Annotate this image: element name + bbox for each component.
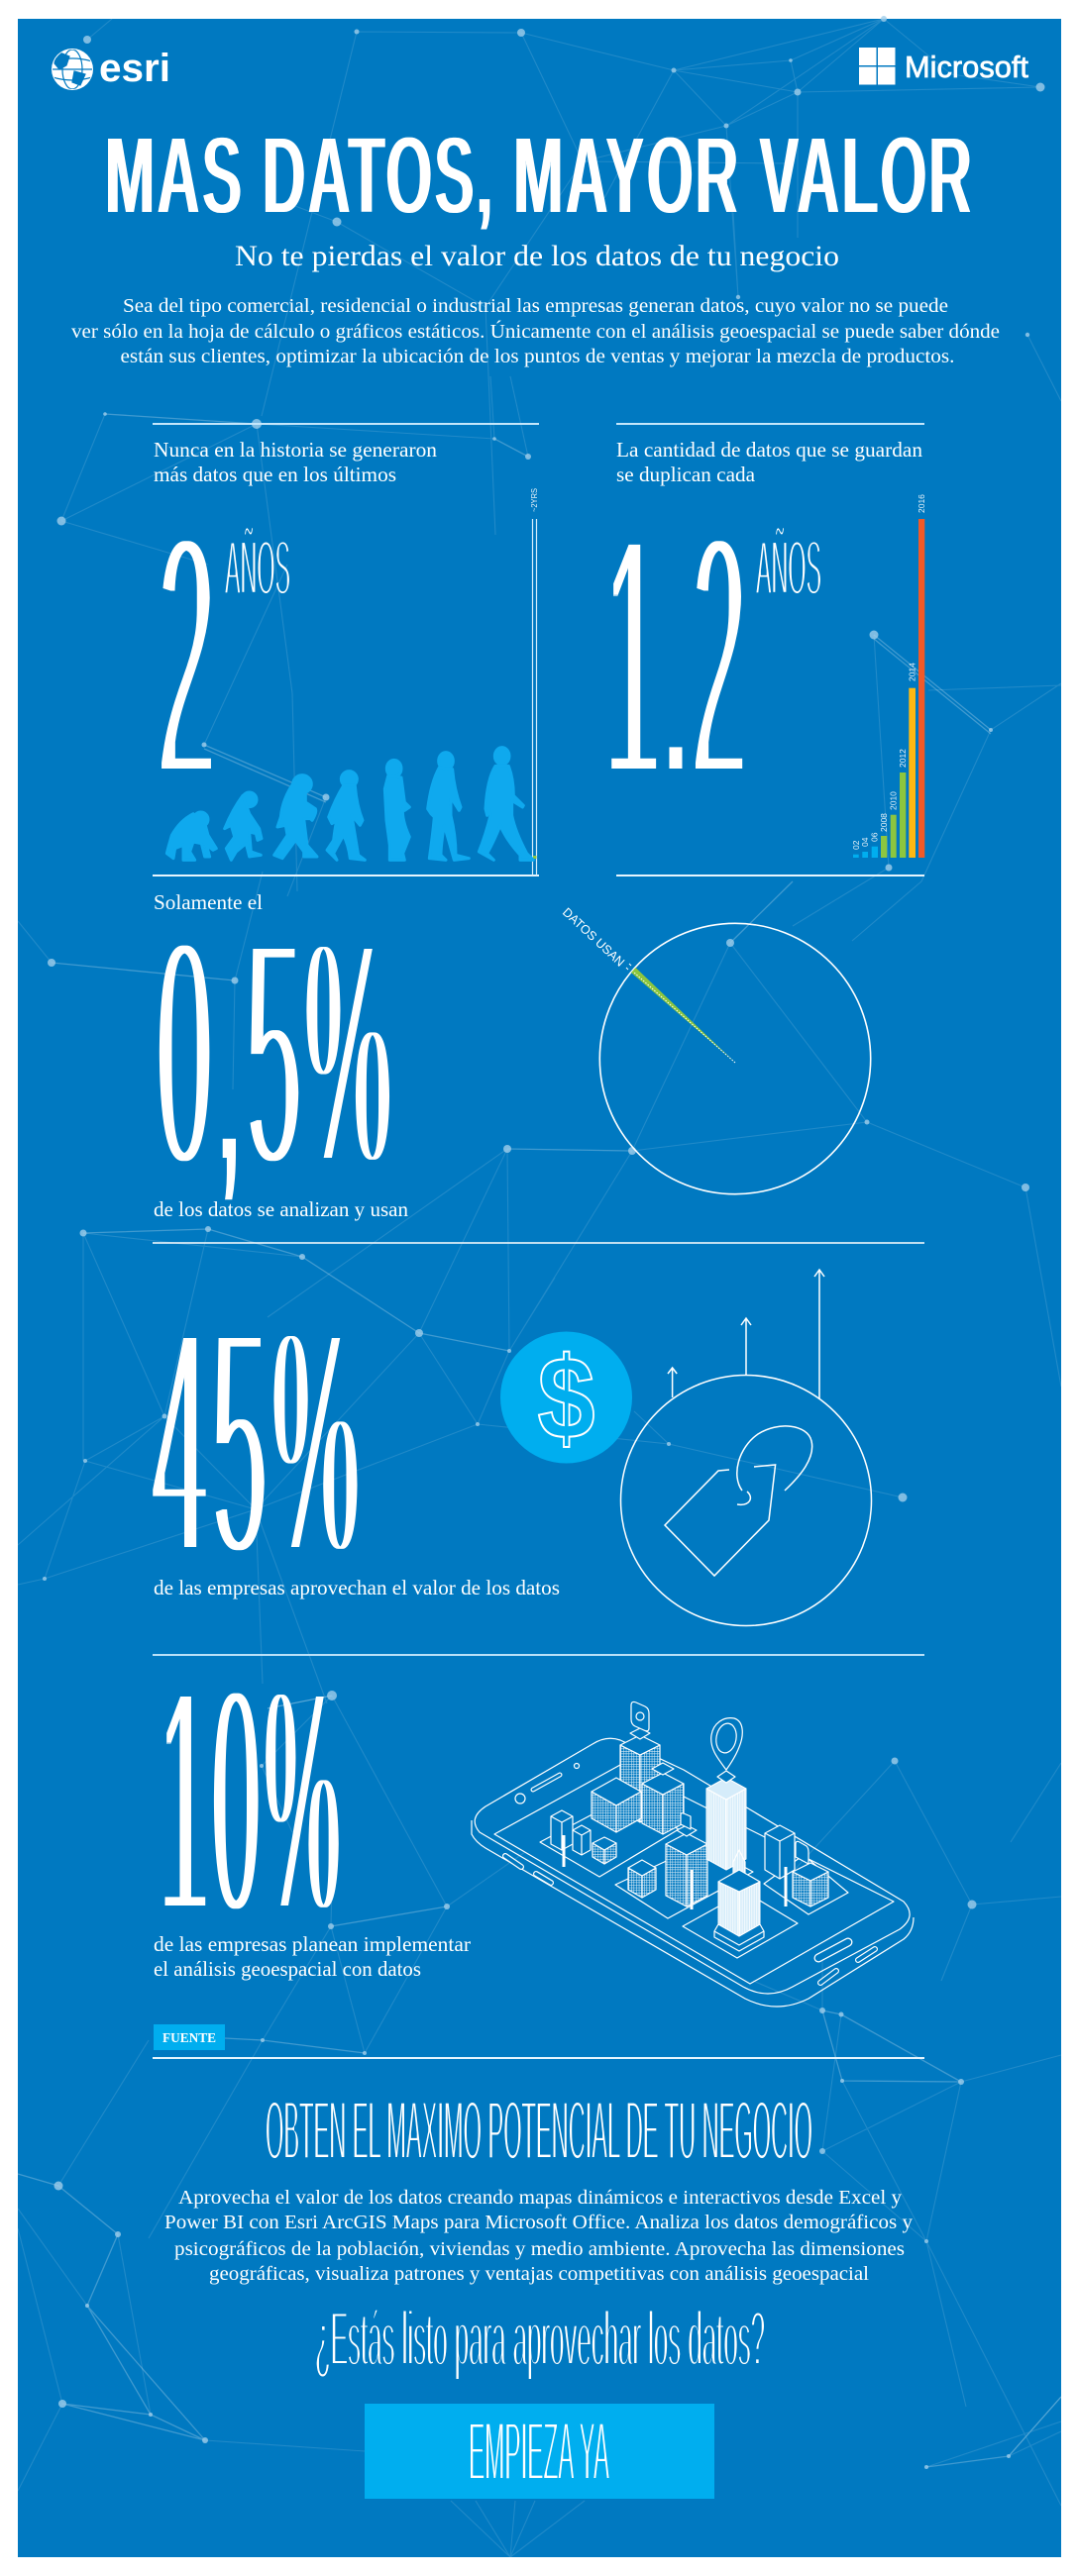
logo: esri — [52, 47, 170, 90]
paragraph: aprovecha el valor: Power BI con Esri ArcGIS Maps para Microsoft Office. Analiza los datos demográficos y — [164, 2212, 914, 2233]
intro paragraph: están sus clientes, optimizar la ubicación de los puntos de ventas y mejorar la mezcla de productos. — [121, 347, 955, 367]
panel: 1.2 años: AÑOS — [756, 524, 821, 611]
button: empieza ya: EMPIEZA YA — [469, 2405, 609, 2498]
logo: esri: esri — [99, 47, 170, 90]
pie chart: 0.5 percent wedge — [560, 905, 871, 1194]
text: de las empresas aprovechan: de las empresas aprovechan el valor de los datos — [154, 1576, 560, 1599]
text: la cantidad de datos — [616, 438, 922, 486]
badge: fuente: FUENTE — [162, 2031, 216, 2046]
bar chart: data growth: 2016 — [916, 494, 926, 513]
panel: 0,5%: 0,5% — [158, 870, 395, 1235]
paragraph: aprovecha el valor: psicográficos de la población, viviendas y medio ambiente. Aprovecha las dimensiones — [174, 2238, 905, 2260]
panel: 1.2 años — [606, 424, 926, 876]
text: la cantidad de datos: se duplican cada — [616, 463, 756, 486]
bar chart: data growth: 2008 — [879, 813, 889, 832]
panel: 45%: 45% — [153, 1259, 365, 1624]
logo: Microsoft: Microsoft — [905, 50, 1028, 84]
bar chart: data growth: 04 — [860, 837, 870, 847]
illustration: smartphone with isometric city — [472, 1701, 914, 2007]
panel: call to action — [164, 2084, 914, 2499]
text: solamente el: Solamente el — [154, 890, 263, 914]
text: nunca en la historia: más datos que en los últimos — [154, 463, 396, 486]
timeline bar — [530, 488, 539, 876]
panel: 2 años: AÑOS — [225, 524, 290, 611]
text: la cantidad de datos: La cantidad de datos que se guardan — [616, 438, 922, 462]
bar chart: data growth: 2010 — [888, 791, 898, 810]
icon: dollar coin: $ — [537, 1333, 594, 1464]
text: de las empresas planean: de las empresas planean implementar — [154, 1932, 471, 1956]
intro paragraph: ver sólo en la hoja de cálculo o gráficos estáticos. Únicamente con el análisis geoespacial se puede saber dónde — [71, 321, 1000, 343]
text: de los datos se analizan: de los datos se analizan y usan — [154, 1197, 409, 1221]
text: de las empresas planean — [154, 1932, 471, 1981]
bar chart: data growth: 2014 — [908, 663, 917, 681]
panel: 10%: 10% — [161, 1617, 345, 1983]
timeline bar: ~2YRS — [530, 488, 539, 512]
paragraph: aprovecha el valor: geográficas, visualiza patrones y ventajas competitivas con análisis geoespacial — [209, 2263, 869, 2285]
bar chart: data growth: 02 — [851, 840, 861, 850]
bar chart: data growth: 06 — [870, 832, 880, 842]
button: empieza ya — [365, 2404, 714, 2499]
icon: price tag with arrows — [620, 1270, 872, 1626]
panel: 2 años — [153, 424, 539, 876]
bar chart: data growth: 2012 — [898, 749, 908, 768]
badge: fuente — [154, 2024, 225, 2050]
pie chart: 0.5 percent wedge: DATOS USAN — [560, 905, 627, 970]
logo: Microsoft — [859, 48, 1028, 85]
icon: human evolution silhouettes — [166, 748, 533, 860]
intro paragraph — [71, 296, 1000, 367]
paragraph: aprovecha el valor — [164, 2187, 914, 2285]
icon: dollar coin — [500, 1331, 632, 1464]
panel: 2 años: 2 — [159, 461, 214, 851]
text: nunca en la historia — [154, 438, 438, 486]
paragraph: aprovecha el valor: Aprovecha el valor de los datos creando mapas dinámicos e interactivos desde Excel y — [178, 2187, 903, 2209]
bar chart: data growth — [851, 494, 926, 858]
subtitle: No te pierdas el valor de los datos de tu negocio — [235, 240, 839, 272]
intro paragraph: Sea del tipo comercial, residencial o industrial las empresas generan datos, cuyo valor no se puede — [123, 296, 948, 317]
text: de las empresas planean: el análisis geoespacial con datos — [154, 1957, 421, 1981]
text: nunca en la historia: Nunca en la historia se generaron — [154, 438, 438, 462]
